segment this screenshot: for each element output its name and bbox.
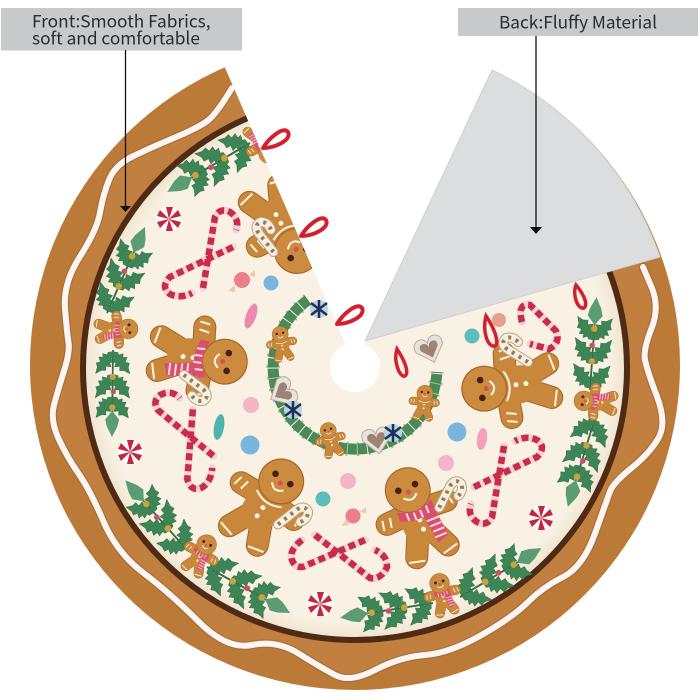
peppermint, left xyxy=(118,440,142,464)
peppermint, upper left xyxy=(156,206,182,232)
hand-held candy canes xyxy=(182,220,528,533)
callout: front label: soft and comfortable xyxy=(32,24,200,50)
callout: front label: Front:Smooth Fabrics, xyxy=(32,8,211,32)
wreath gingerbread man 3 xyxy=(409,384,439,420)
small gingerbread man, bottom xyxy=(421,569,464,618)
icing shadow xyxy=(53,88,662,678)
candy canes, left xyxy=(127,388,238,493)
wreath gingerbread man 2 xyxy=(313,419,348,459)
holly branch, bottom left xyxy=(192,543,303,636)
candy canes, lower right xyxy=(470,438,542,524)
small gingerbread man, lower left xyxy=(177,528,226,580)
holly branch, lower left xyxy=(107,464,208,569)
holly branch, lower right xyxy=(544,408,620,514)
holly branch, top xyxy=(154,119,266,214)
dark chocolate ring and cream centre xyxy=(83,96,627,640)
panel: back side grey fluffy wedge xyxy=(365,70,660,341)
callout: front label xyxy=(1,8,242,50)
callout: back label: Back:Fluffy Material xyxy=(499,8,657,34)
candy canes, upper left xyxy=(165,210,237,296)
inner crust between icing and ring xyxy=(53,88,662,678)
wreath heart 2 xyxy=(361,426,393,456)
peppermint, right xyxy=(528,506,554,530)
candy cane, right (clipped) xyxy=(521,305,557,349)
large gingerbread man, bottom with scarf xyxy=(365,455,469,571)
small gingerbread man, right xyxy=(572,384,617,420)
inner wreath xyxy=(264,300,448,459)
small gingerbread man, left xyxy=(95,312,140,348)
candy canes, bottom xyxy=(291,535,387,578)
small gingerbread man, top (clipped) xyxy=(239,118,288,170)
holly branch, upper left xyxy=(82,217,168,326)
wreath snowflake 1 xyxy=(310,300,328,318)
arrow: back label to grey wedge xyxy=(530,36,542,234)
wreath snowflake 3 xyxy=(384,424,402,442)
white icing wave xyxy=(53,88,662,678)
large gingerbread man, left xyxy=(149,316,252,401)
wreath heart 3 xyxy=(412,333,448,367)
large gingerbread man, top (clipped) xyxy=(229,170,341,289)
large gingerbread man, lower left xyxy=(210,441,325,562)
wreath gingerbread man 1 xyxy=(266,324,298,362)
large gingerbread man, right xyxy=(457,343,560,428)
peppermint, bottom xyxy=(308,592,332,616)
wreath snowflake 2 xyxy=(284,401,302,419)
arrow: front label to skirt xyxy=(120,50,131,212)
holly branch, upper right xyxy=(565,295,622,395)
scattered candies xyxy=(212,270,506,526)
red hanging ribbons xyxy=(263,130,586,376)
holly branch, left xyxy=(88,347,137,437)
wreath heart 1 xyxy=(264,374,300,412)
white cut-out wedge and centre hole xyxy=(216,20,506,392)
callout: back label xyxy=(458,8,698,36)
holly branch, bottom right xyxy=(444,526,555,621)
holly branch, bottom xyxy=(336,577,440,643)
